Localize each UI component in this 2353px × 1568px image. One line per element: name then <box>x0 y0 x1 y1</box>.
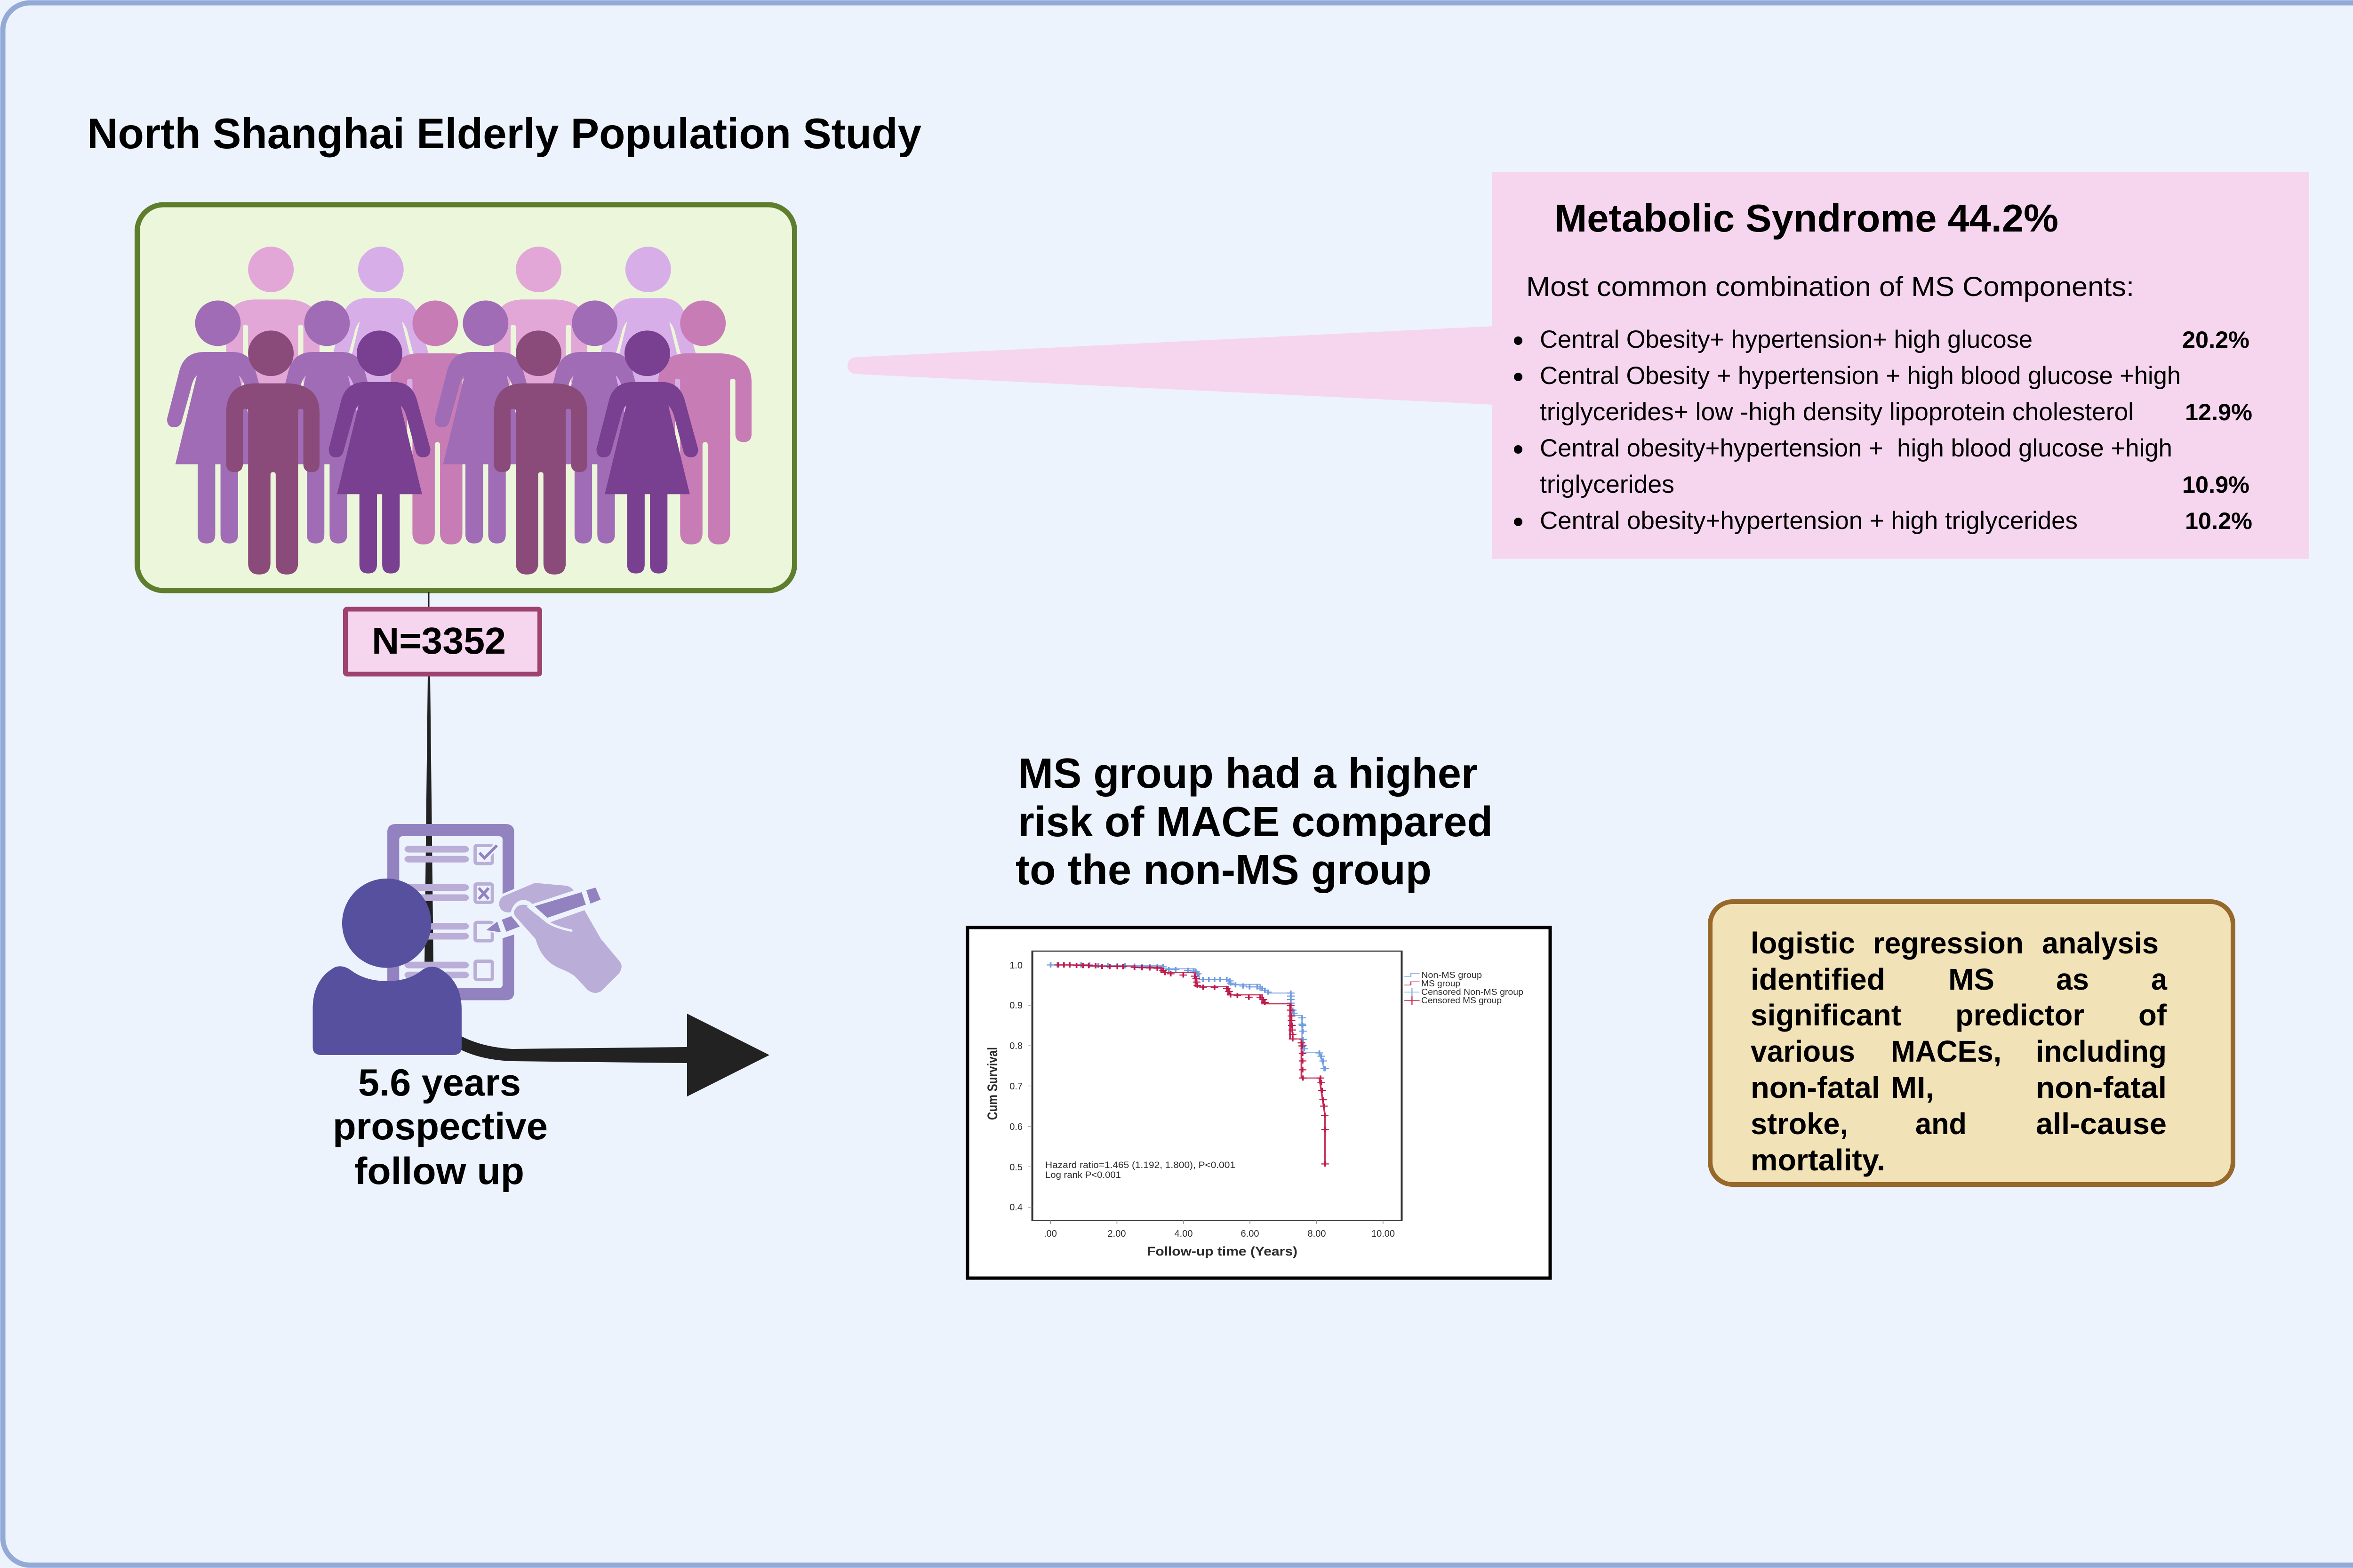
heading: metabolic syndrome: Metabolic Syndrome 44.2% <box>1554 196 2058 240</box>
y axis title: Cum Survival <box>985 1047 1000 1120</box>
bullet list: Central obesity+hypertension + high blood glucose +high <box>1540 434 2172 462</box>
bullet list: triglycerides <box>1540 471 1674 498</box>
finding text: various <box>1751 1034 1855 1068</box>
x axis labels: 6.00 <box>1241 1229 1259 1239</box>
x axis labels: 8.00 <box>1308 1229 1326 1239</box>
x axis labels: .00 <box>1044 1229 1057 1239</box>
panel: study population <box>137 205 794 591</box>
title: North Shanghai Elderly Population Study <box>87 110 921 158</box>
heading: MACE risk: MS group had a higher <box>1018 750 1478 797</box>
heading: MACE risk: to the non-MS group <box>1016 847 1432 894</box>
arrow <box>452 1014 769 1096</box>
y axis labels: 0.6 <box>1009 1122 1023 1132</box>
finding text: MI, <box>1891 1071 1934 1104</box>
bullet list: 10.2% <box>2185 508 2252 534</box>
sample size box <box>345 609 540 674</box>
finding text: MACEs, <box>1891 1034 2001 1068</box>
finding text: stroke, <box>1751 1107 1848 1141</box>
bullet list: Central Obesity+ hypertension+ high glucose <box>1540 326 2033 353</box>
finding text: identified <box>1751 962 1885 996</box>
connector line from population to follow up <box>424 592 433 966</box>
finding text: of <box>2138 998 2167 1032</box>
subheading: Most common combination of MS Components: <box>1526 272 2134 302</box>
finding text: including <box>2036 1034 2167 1068</box>
finding text <box>1751 926 2167 1177</box>
icon: person <box>313 879 462 1055</box>
finding text: and <box>1915 1107 1967 1141</box>
follow up label: 5.6 years <box>358 1062 521 1104</box>
panel: logistic regression finding <box>1710 902 2233 1184</box>
finding text: a <box>2151 962 2167 996</box>
legend <box>1421 970 1523 1005</box>
finding text: all-cause <box>2036 1107 2167 1141</box>
icon: group of people <box>167 247 752 575</box>
panel: metabolic syndrome <box>1492 172 2309 559</box>
y axis labels: 0.9 <box>1009 1000 1023 1011</box>
y axis labels <box>1009 960 1023 1213</box>
legend: MS group <box>1421 979 1460 988</box>
finding text: predictor <box>1955 998 2084 1032</box>
bullet list: Central Obesity + hypertension + high blood glucose +high <box>1540 362 2181 390</box>
finding text: non-fatal <box>2036 1071 2167 1104</box>
heading: MACE risk: risk of MACE compared <box>1018 799 1493 846</box>
x axis labels: 4.00 <box>1175 1229 1193 1239</box>
x axis title: Follow-up time (Years) <box>1147 1244 1297 1258</box>
finding text: logistic <box>1751 926 1855 960</box>
x axis labels <box>1044 1229 1395 1239</box>
hazard ratio annotation: Log rank P<0.001 <box>1045 1170 1121 1180</box>
bullet list: Central obesity+hypertension + high triglycerides <box>1540 507 2078 535</box>
finding text: MS <box>1948 962 1994 996</box>
y axis labels: 0.8 <box>1009 1041 1023 1051</box>
x axis labels: 2.00 <box>1108 1229 1126 1239</box>
bullet list <box>1514 326 2252 535</box>
finding text: as <box>2056 962 2089 996</box>
hazard ratio annotation <box>1045 1160 1235 1180</box>
bullet list: 20.2% <box>2182 327 2249 353</box>
callout wedge <box>848 326 1494 405</box>
finding text: significant <box>1751 998 1901 1032</box>
finding text: non-fatal <box>1751 1071 1880 1104</box>
x axis labels: 10.00 <box>1371 1229 1395 1239</box>
legend: Censored MS group <box>1421 996 1502 1005</box>
legend: Censored Non-MS group <box>1421 987 1523 997</box>
sample size box: N=3352 <box>372 620 506 662</box>
bullet list: 12.9% <box>2185 399 2252 425</box>
icon: clipboard questionnaire with hand <box>387 824 622 1000</box>
follow up label: prospective <box>333 1105 548 1148</box>
legend: Non-MS group <box>1421 970 1482 980</box>
y axis labels: 0.4 <box>1009 1202 1023 1213</box>
panel: survival chart <box>968 928 1550 1278</box>
hazard ratio annotation: Hazard ratio=1.465 (1.192, 1.800), P<0.001 <box>1045 1160 1235 1170</box>
y axis labels: 0.7 <box>1009 1081 1023 1092</box>
y axis labels: 1.0 <box>1009 960 1023 971</box>
chart: Kaplan-Meier curves <box>1028 951 1420 1224</box>
finding text: mortality. <box>1751 1143 1885 1177</box>
follow up label <box>333 1062 548 1192</box>
bullet list: triglycerides+ low -high density lipoprotein cholesterol <box>1540 398 2134 426</box>
follow up label: follow up <box>354 1150 524 1192</box>
y axis labels: 0.5 <box>1009 1162 1023 1173</box>
heading: MACE risk <box>1016 750 1493 894</box>
bullet list: 10.9% <box>2182 472 2249 498</box>
finding text: analysis <box>2042 926 2159 960</box>
finding text: regression <box>1873 926 2024 960</box>
